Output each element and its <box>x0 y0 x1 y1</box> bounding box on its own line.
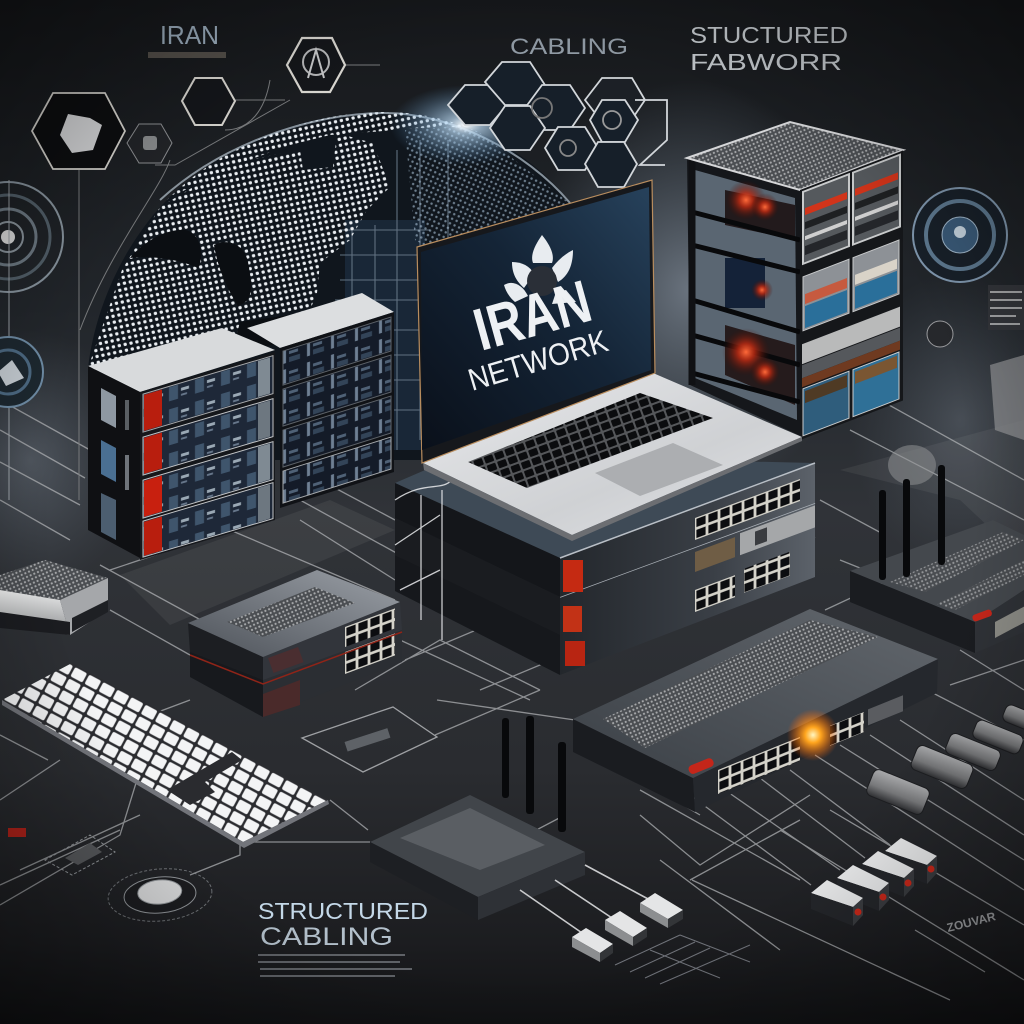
silver plugs <box>865 703 1024 816</box>
bottom label: structured cabling: STRUCTURED <box>258 898 428 924</box>
laptop screen <box>417 180 655 463</box>
hexagon: small dark <box>127 124 172 163</box>
red tipped plugs <box>811 838 937 926</box>
bottom right faint table: ZOUVAR <box>945 909 997 935</box>
large switch mesh top <box>603 620 878 748</box>
laptop keyboard <box>468 393 713 488</box>
hexagon: empty outline <box>182 78 235 125</box>
white keyboard <box>2 663 329 848</box>
globe wireframe grid <box>335 140 448 450</box>
tower front <box>800 150 903 440</box>
router antennas <box>502 716 566 832</box>
title label: structured fabworr: FABWORR <box>690 49 842 75</box>
stack top unit <box>395 455 815 597</box>
bottom label: structured cabling <box>258 898 428 976</box>
title label: IRAN <box>148 20 226 58</box>
bottom right faint table <box>615 909 997 984</box>
hexagon mesh top center <box>448 62 667 187</box>
laptop screen text: NETWORK <box>464 323 612 398</box>
hexagon network icons <box>32 38 380 500</box>
switch stack under laptop <box>395 455 815 675</box>
laptop base <box>423 373 802 535</box>
bottom left floor icons <box>8 828 214 925</box>
rack middle front <box>280 312 394 508</box>
bottom center router <box>370 716 683 962</box>
rack left top <box>88 328 275 392</box>
keyboard gap <box>167 752 242 805</box>
rack left side <box>88 366 140 558</box>
server tower right <box>687 122 903 440</box>
globe <box>80 85 580 470</box>
stack middle unit <box>395 503 815 635</box>
laptop trackpad <box>595 443 723 496</box>
floor card panel <box>302 707 437 772</box>
left side radar icon <box>0 180 63 500</box>
glowing status light <box>787 709 839 761</box>
upper small switch <box>188 570 402 680</box>
right side radar icon <box>913 188 1007 282</box>
globe dark seas <box>130 230 287 346</box>
server rack left <box>88 328 275 560</box>
laptop screen logo <box>504 235 576 304</box>
hexagon: large shield <box>32 93 125 169</box>
stack bottom unit <box>395 537 815 675</box>
floor circuit lines <box>0 400 1024 1000</box>
tower side <box>687 158 805 438</box>
stack cables <box>395 480 452 640</box>
laptop <box>417 180 802 541</box>
router cables and plugs <box>520 865 683 962</box>
right router <box>850 465 1024 653</box>
server rack middle <box>247 293 394 508</box>
globe dotted continents <box>88 133 390 372</box>
title label: structured fabworr <box>690 22 848 75</box>
globe dotted rim <box>167 112 461 200</box>
rack left front <box>140 352 275 560</box>
title label: CABLING: CABLING <box>510 34 628 59</box>
glass reflections on floor <box>120 420 1024 625</box>
bottom right connector plugs <box>811 703 1024 926</box>
laptop screen text <box>464 267 612 398</box>
title label: structured fabworr: STUCTURED <box>690 22 848 48</box>
small stacked switches <box>188 570 402 717</box>
large switch with glow <box>573 609 938 812</box>
bottom label: structured cabling: CABLING <box>260 923 393 951</box>
globe faint dotted hemisphere <box>405 126 566 244</box>
left edge device <box>0 560 108 635</box>
globe light flare <box>390 85 540 165</box>
right router body <box>850 520 1024 622</box>
router body <box>370 795 585 897</box>
laptop screen text: IRAN <box>467 267 598 364</box>
lower small switch <box>190 628 402 717</box>
large switch ports <box>718 695 903 794</box>
right router antennas <box>879 465 945 580</box>
title label: IRAN: IRAN <box>160 20 219 50</box>
hexagon: logo <box>287 38 345 92</box>
right side small text and icons <box>888 285 1024 485</box>
left side small round icon <box>0 337 43 407</box>
rack middle top <box>247 293 394 348</box>
tower top mesh <box>687 122 903 190</box>
